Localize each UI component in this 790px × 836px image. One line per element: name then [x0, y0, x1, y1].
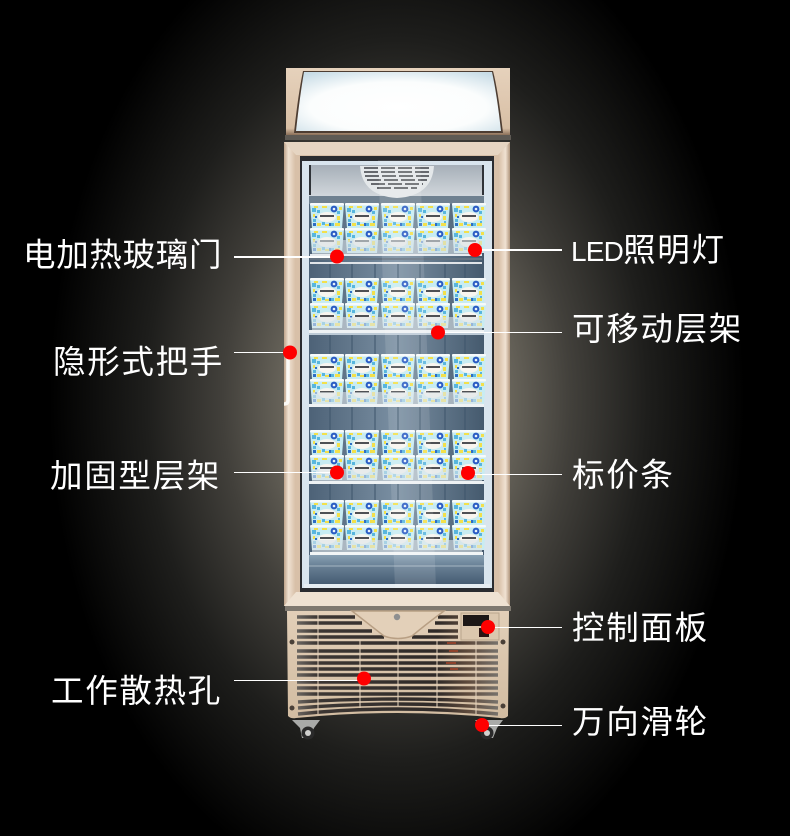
base grille: [285, 606, 511, 718]
callout: 工作散热孔: [51, 672, 371, 709]
fan grille: [360, 166, 434, 198]
callout: LED照明灯: [468, 232, 726, 268]
callout: 加固型层架: [50, 458, 344, 494]
door frame: [284, 142, 510, 606]
control panel: [461, 613, 499, 640]
callout: 可移动层架: 可移动层架: [572, 311, 743, 347]
freezer interior: [304, 160, 490, 588]
callout: 控制面板: [481, 610, 709, 646]
callout: 隐形式把手: 隐形式把手: [53, 344, 224, 380]
callout: 工作散热孔: 工作散热孔: [51, 673, 222, 709]
shelves and price strips: [309, 240, 484, 555]
bottom floor: [304, 555, 490, 588]
callout: 加固型层架: 加固型层架: [50, 458, 221, 494]
callout: 标价条: 标价条: [572, 457, 675, 493]
callout: 电加热玻璃门: [23, 237, 344, 273]
callout: 万向滑轮: 万向滑轮: [572, 704, 709, 740]
freezer cabinet: [284, 68, 511, 740]
product rows: [310, 203, 486, 550]
right caster: [475, 720, 503, 740]
callout: 控制面板: 控制面板: [572, 610, 709, 646]
left caster: [292, 720, 320, 740]
callout: LED照明灯: LED照明灯: [571, 232, 726, 268]
top light box: [285, 68, 511, 140]
callout: 标价条: [461, 457, 675, 493]
callout: 可移动层架: [431, 311, 743, 347]
callout: 电加热玻璃门: 电加热玻璃门: [23, 237, 222, 273]
glass reflection: [378, 160, 436, 588]
hidden handle: [284, 358, 288, 404]
callout: 万向滑轮: [475, 704, 709, 740]
